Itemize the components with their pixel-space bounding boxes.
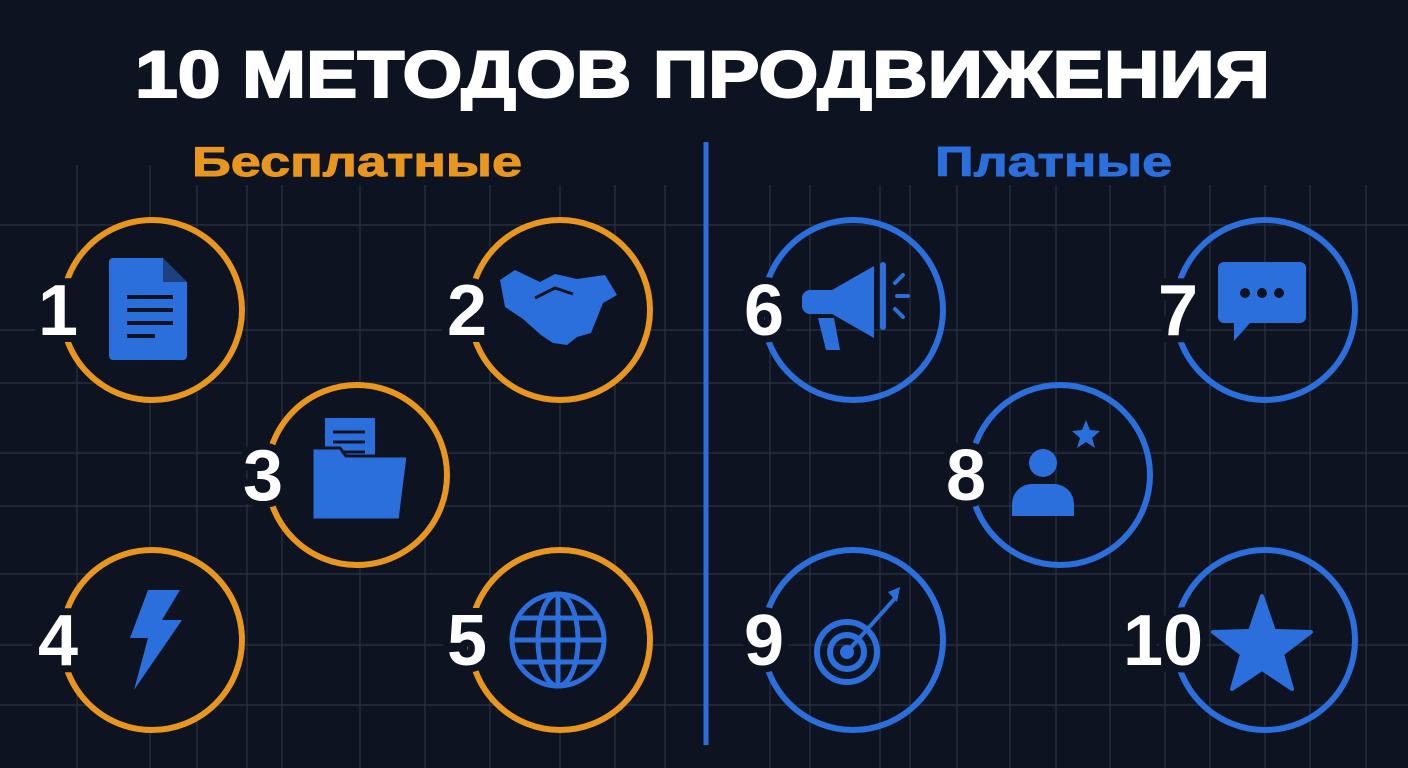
item 5: globe [447,550,650,730]
item 2: handshake [447,220,650,400]
item 8: person with star: 8 [946,436,986,516]
title: 10 МЕТОДОВ ПРОДВИЖЕНИЯ [135,37,1270,111]
item 6: megaphone: 6 [744,271,784,351]
item 7: chat [1158,220,1355,400]
item 1: document: 1 [38,271,78,351]
item 8: person with star [946,385,1150,565]
item 3: folder: 3 [243,436,283,516]
item 5: globe: 5 [447,601,487,681]
divider [704,142,708,745]
item 9: target [744,550,943,730]
item 1: document [38,220,242,400]
item 4: lightning: 4 [38,601,78,681]
item 3: folder [243,385,447,565]
heading: free: Бесплатные [192,138,522,185]
item 10: star [1123,550,1355,730]
heading: paid: Платные [935,138,1172,185]
item 4: lightning [38,550,242,730]
item 9: target: 9 [744,601,784,681]
item 10: star: 10 [1123,601,1203,681]
item 2: handshake: 2 [447,271,487,351]
item 7: chat: 7 [1158,271,1198,351]
item 6: megaphone [744,220,943,400]
